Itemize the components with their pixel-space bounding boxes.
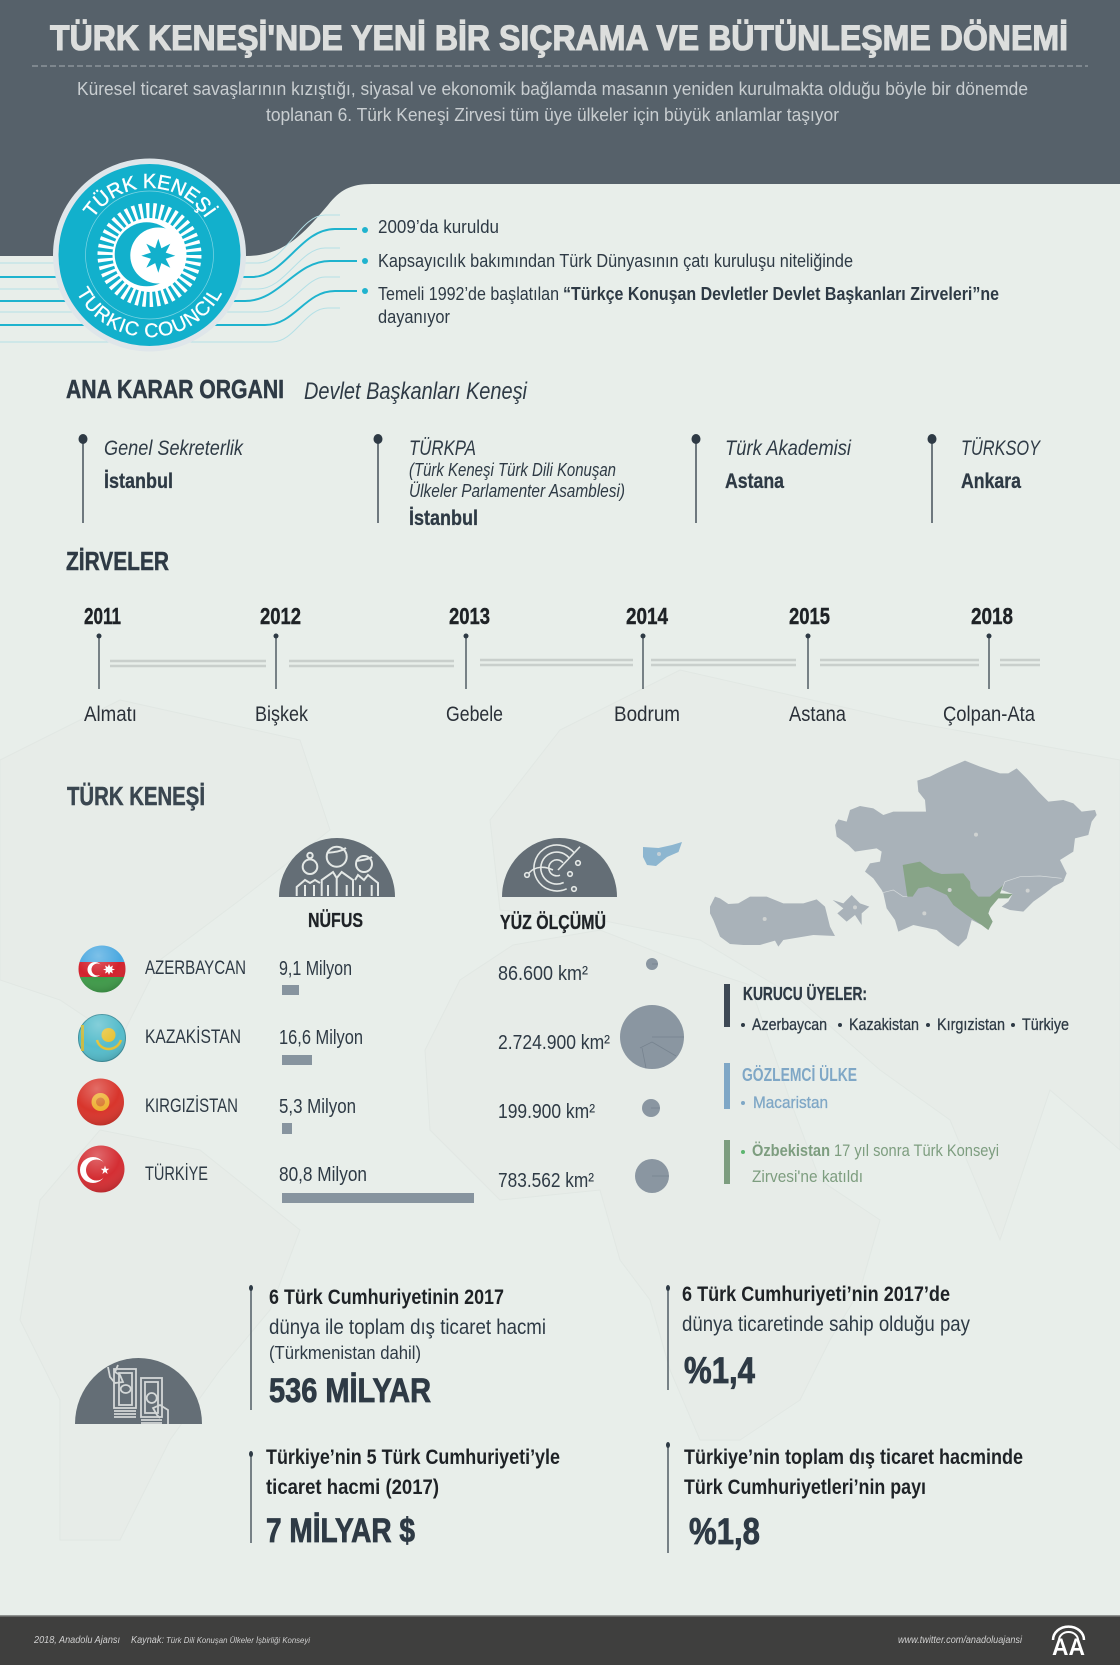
timeline: summits: 2014 [626,603,668,629]
footer: 2018, Anadolu Ajansı [33,1635,120,1646]
column heading: nüfus: NÜFUS [308,909,363,932]
icon: radar dome [502,838,617,897]
stat: Türkiye trade share: Türkiye’nin toplam dış ticaret hacminde [684,1446,1023,1469]
row: Türkiye: 80,8 Milyon [279,1164,367,1186]
timeline: summits: 2013 [449,603,490,629]
heading: türk keneşi: TÜRK KENEŞİ [67,781,205,811]
legend: Uzbekistan note: Zirvesi'ne katıldı [752,1167,863,1186]
stat: Türkiye trade volume: ticaret hacmi (2017) [266,1476,439,1499]
row: Kazakistan: KAZAKİSTAN [145,1025,241,1048]
timeline: summits: Bodrum [614,703,680,726]
stat: world trade share: dünya ticaretinde sahip olduğu pay [682,1313,970,1336]
timeline: summits: Gebele [446,703,503,726]
logo: Türk Keneşi emblem: TURKIC COUNCIL [78,286,222,338]
subtitle: Küresel ticaret savaşlarının kızıştığı, siyasal ve ekonomik bağlamda masanın yeniden kurulmakta olduğu böyle bir dönemde [77,78,1028,99]
legend: founding members: Kazakistan [849,1015,919,1034]
row: Azerbaycan [78,945,658,995]
stat: total foreign trade: 536 MİLYAR [269,1372,431,1410]
timeline: summits: 2015 [789,603,830,629]
background: faint world map [0,670,1120,1540]
organ: Türk Akademisi [692,434,852,523]
organ: Genel Sekreterlik: İstanbul [104,469,173,493]
row: Azerbaycan: 86.600 km² [498,963,588,985]
heading: zirveler: ZİRVELER [66,546,169,576]
organ: TÜRKSOY: TÜRKSOY [961,436,1041,460]
timeline: summits: 2018 [971,603,1013,629]
row: Kırgızistan [77,1078,660,1134]
icon: money exchange dome [75,1358,202,1424]
icon: Anadolu Agency logo: AA [1052,1634,1085,1661]
organ: TÜRKPA: TÜRKPA [409,436,476,460]
row: Türkiye: TÜRKİYE [145,1162,208,1185]
organ: Türk Akademisi: Astana [725,469,785,493]
timeline: summits [84,603,1040,726]
legend: observer [724,1063,857,1112]
stat: total foreign trade: 6 Türk Cumhuriyetinin 2017 [269,1286,504,1309]
stat: Türkiye trade share [666,1442,1023,1553]
column heading: yüz ölçümü: YÜZ ÖLÇÜMÜ [500,911,606,934]
organ: Türk Akademisi: Türk Akademisi [725,436,852,460]
connector lines from logo [0,215,357,342]
timeline: summits: 2011 [84,603,121,629]
bullet list: facts: Temeli 1992’de başlatılan [378,283,559,304]
organ: TÜRKPA: Ülkeler Parlamenter Asamblesi) [409,481,625,501]
row: Türkiye: 783.562 km² [498,1170,594,1192]
row: Azerbaycan: 9,1 Milyon [279,958,352,980]
legend: founding members: KURUCU ÜYELER: [743,984,867,1004]
bullet list: facts: “Türkçe Konuşan Devletler Devlet Başkanları Zirveleri”ne [563,283,999,304]
timeline: summits: 2012 [260,603,301,629]
heading: ana karar organı [66,374,528,405]
row: Kazakistan: 2.724.900 km² [498,1032,610,1054]
stat: Türkiye trade volume: Türkiye’nin 5 Türk Cumhuriyeti’yle [266,1446,560,1469]
legend: observer: Macaristan [753,1093,828,1112]
subtitle: toplanan 6. Türk Keneşi Zirvesi tüm üye ülkeler için büyük anlamlar taşıyor [266,104,839,125]
heading: ana karar organı: ANA KARAR ORGANI [66,374,284,404]
footer: www.twitter.com/anadoluajansi [898,1635,1023,1646]
organ: TÜRKPA [374,434,625,530]
row: Kırgızistan: 199.900 km² [498,1101,595,1123]
row: Kazakistan [78,1005,684,1069]
row: Kırgızistan: KIRGIZİSTAN [145,1094,238,1117]
timeline: summits: Astana [789,703,846,726]
icon: people dome [279,838,395,897]
stat: total foreign trade: (Türkmenistan dahil) [269,1343,421,1363]
organ: TÜRKPA: İstanbul [409,506,478,530]
organ: TÜRKSOY [928,434,1041,523]
header band [0,0,1120,256]
timeline: summits: Bişkek [255,703,308,726]
timeline: summits: Çolpan-Ata [943,703,1035,726]
bullet list: facts: Kapsayıcılık bakımından Türk Dünyasının çatı kuruluşu niteliğinde [378,250,853,271]
stat: Türkiye trade volume: 7 MİLYAR $ [266,1512,415,1550]
stat: world trade share [666,1283,970,1391]
stat: world trade share: 6 Türk Cumhuriyeti’nin 2017’de [682,1283,950,1306]
row: Kazakistan: 16,6 Milyon [279,1027,363,1049]
organ: TÜRKPA: (Türk Keneşi Türk Dili Konuşan [409,460,616,480]
bullet list: facts: dayanıyor [378,306,450,327]
bullet list: facts: 2009’da kuruldu [378,216,499,237]
legend: Uzbekistan note [724,1140,999,1186]
stat: total foreign trade: dünya ile toplam dış ticaret hacmi [269,1316,546,1339]
legend: founding members: Kırgızistan [937,1015,1005,1034]
logo: Türk Keneşi emblem [53,158,246,352]
stat: Türkiye trade share: Türk Cumhuriyetleri’nin payı [684,1476,926,1499]
row: Kırgızistan: 5,3 Milyon [279,1096,356,1118]
organ: TÜRKSOY: Ankara [961,469,1022,493]
organ: Genel Sekreterlik [78,434,244,523]
bullet list: facts [362,216,999,327]
row: Türkiye [78,1146,669,1203]
stat: Türkiye trade share: %1,8 [689,1511,760,1552]
legend: Uzbekistan note: 17 yıl sonra Türk Konseyi [834,1141,999,1160]
heading: ana karar organı: Devlet Başkanları Keneşi [304,378,528,405]
subtitle [77,78,1028,125]
map: member countries [710,761,1097,947]
footer [0,1615,1120,1665]
logo: Türk Keneşi emblem: TÜRK KENEŞİ [82,174,220,218]
stat: total foreign trade [249,1285,546,1410]
stat: world trade share: %1,4 [684,1350,755,1391]
legend: founding members: Azerbaycan [752,1015,827,1034]
legend: observer: GÖZLEMCİ ÜLKE [742,1065,857,1085]
legend: founding members [724,984,1069,1034]
map: Hungary [643,842,682,866]
organ: Genel Sekreterlik: Genel Sekreterlik [104,436,244,460]
legend: founding members: Türkiye [1022,1015,1069,1034]
row: Azerbaycan: AZERBAYCAN [145,957,246,979]
footer: Kaynak: [131,1635,164,1646]
stat: Türkiye trade volume [249,1446,560,1550]
footer: Türk Dili Konuşan Ülkeler İşbirliği Konseyi [166,1635,311,1645]
legend: Uzbekistan note: Özbekistan [752,1141,830,1160]
timeline: summits: Almatı [84,703,137,726]
